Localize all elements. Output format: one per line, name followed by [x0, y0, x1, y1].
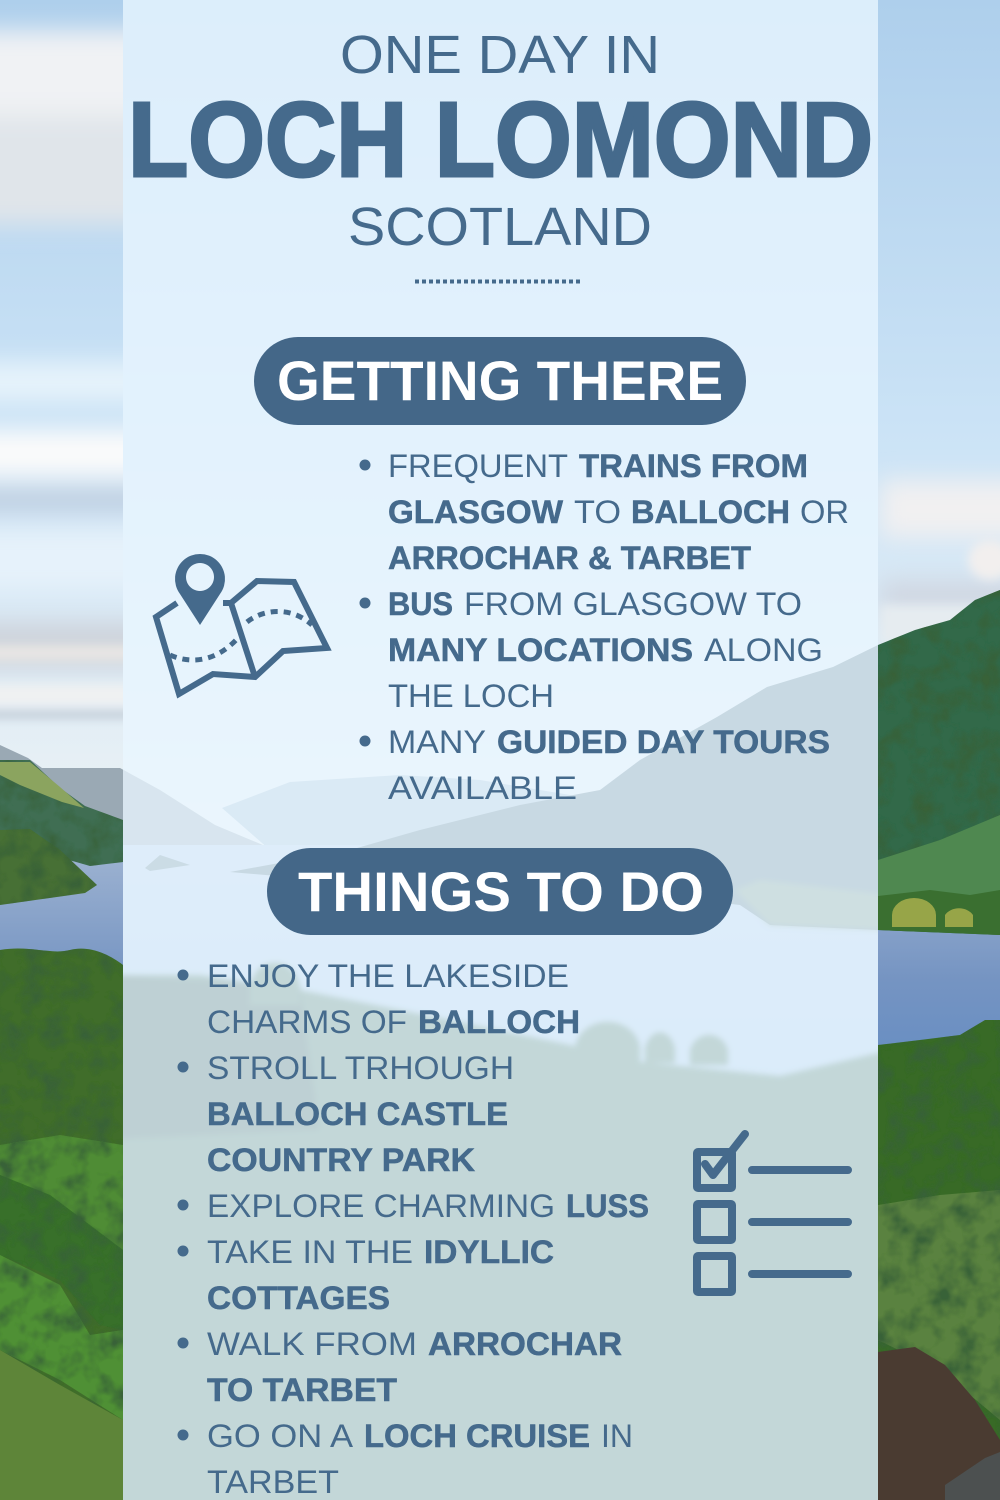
heading pill: things to do: THINGS TO DO	[298, 860, 704, 923]
getting there list: FROM GLASGOW TO	[464, 586, 802, 622]
getting there list: GLASGOW	[388, 494, 564, 530]
getting there list: ALONG	[704, 632, 823, 668]
water	[0, 845, 1000, 1115]
icon: checklist	[697, 1134, 848, 1292]
things to do list: COUNTRY PARK	[207, 1142, 475, 1178]
getting there list	[360, 448, 849, 806]
getting there list: MANY LOCATIONS	[388, 632, 693, 668]
clouds	[0, 30, 1000, 717]
things to do list: ARROCHAR	[428, 1326, 622, 1362]
things to do list: TARBET	[207, 1464, 339, 1500]
things to do list: LUSS	[566, 1188, 649, 1224]
far right mountain under panel	[230, 645, 878, 930]
things to do list	[178, 958, 649, 1500]
title	[128, 25, 873, 257]
things to do list: GO ON A	[207, 1418, 354, 1454]
getting there list: OR	[800, 494, 849, 530]
things to do list: EXPLORE CHARMING	[207, 1188, 555, 1224]
getting there list: TRAINS FROM	[579, 448, 808, 484]
title: ONE DAY IN	[340, 25, 660, 85]
things to do list: STROLL TRHOUGH	[207, 1050, 514, 1086]
things to do list: TAKE IN THE	[207, 1234, 413, 1270]
things to do list: BALLOCH	[418, 1004, 580, 1040]
icon: map with pin	[156, 554, 327, 694]
right mountain	[878, 590, 1000, 935]
things to do list: IN	[601, 1418, 633, 1454]
things to do list: WALK FROM	[207, 1326, 417, 1362]
foreground under panel	[110, 963, 890, 1500]
getting there list: BUS	[388, 586, 453, 622]
left foreground	[0, 949, 123, 1500]
things to do list: BALLOCH CASTLE	[207, 1096, 508, 1132]
getting there list: TO	[574, 494, 621, 530]
things to do list: TO TARBET	[207, 1372, 397, 1408]
things to do list: COTTAGES	[207, 1280, 390, 1316]
things to do list: IDYLLIC	[424, 1234, 554, 1270]
heading pill: things to do	[267, 848, 733, 935]
left hills	[0, 760, 123, 866]
title: SCOTLAND	[348, 197, 652, 257]
translucent panel	[123, 0, 878, 1500]
right foreground	[878, 1020, 1000, 1500]
heading pill: getting there: GETTING THERE	[277, 349, 723, 412]
heading pill: getting there	[254, 337, 746, 425]
getting there list: BALLOCH	[631, 494, 790, 530]
getting there list: MANY	[388, 724, 486, 760]
getting there list: ARROCHAR & TARBET	[388, 540, 751, 576]
getting there list: AVAILABLE	[388, 770, 577, 806]
getting there list: GUIDED DAY TOURS	[497, 724, 830, 760]
getting there list: FREQUENT	[388, 448, 568, 484]
title: LOCH LOMOND	[128, 81, 873, 199]
distant hills	[0, 745, 270, 862]
things to do list: CHARMS OF	[207, 1004, 407, 1040]
things to do list: LOCH CRUISE	[364, 1418, 590, 1454]
things to do list: ENJOY THE LAKESIDE	[207, 958, 569, 994]
getting there list: THE LOCH	[388, 678, 554, 714]
